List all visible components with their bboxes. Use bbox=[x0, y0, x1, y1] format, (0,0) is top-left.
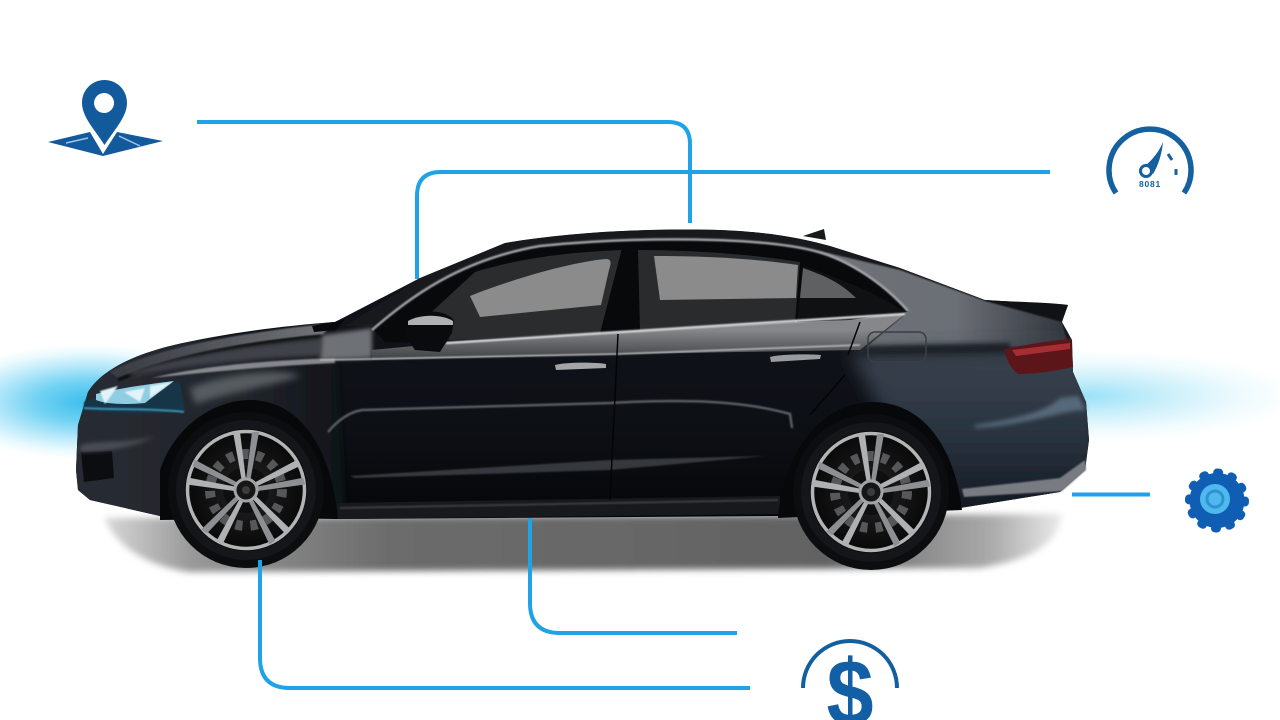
C pillar gray panel bbox=[815, 250, 1068, 352]
roof band bbox=[418, 230, 984, 300]
map roads bbox=[66, 136, 140, 146]
lower sill trim bbox=[337, 496, 780, 519]
bumper highlight bbox=[80, 436, 155, 452]
door handle rear bbox=[770, 354, 821, 362]
icon: dollar bbox=[803, 640, 897, 720]
gauge arc bbox=[1109, 129, 1191, 193]
connector line: location to roof bbox=[197, 122, 690, 223]
icon: speedometer bbox=[1109, 129, 1191, 193]
rear crease shadow bbox=[860, 343, 1010, 354]
needle bbox=[1146, 142, 1163, 174]
cowl vent bbox=[312, 319, 345, 332]
quarter window bbox=[797, 266, 905, 322]
rear quarter panel bbox=[850, 345, 1100, 520]
spoiler bbox=[985, 300, 1068, 320]
shoulder band bbox=[372, 314, 905, 360]
antenna bbox=[803, 229, 826, 240]
front window bbox=[412, 250, 622, 340]
quarter window reflection bbox=[800, 268, 856, 298]
car bbox=[70, 229, 1100, 570]
mirror highlight bbox=[408, 316, 453, 325]
door crease bbox=[328, 401, 792, 432]
car body bbox=[76, 230, 1089, 519]
hood top highlight bbox=[110, 323, 335, 378]
rear window bbox=[638, 250, 800, 331]
dollar arc bbox=[803, 641, 897, 688]
tail light bbox=[1004, 339, 1073, 374]
mirror bbox=[404, 311, 454, 352]
connector line: gauge to windshield bbox=[417, 172, 1050, 279]
belt chrome bbox=[446, 314, 905, 343]
fender top reflection bbox=[190, 372, 300, 404]
door handle front bbox=[555, 363, 606, 370]
door seam bbox=[610, 322, 860, 500]
tail light highlight bbox=[1012, 343, 1070, 356]
window surround bbox=[374, 240, 908, 343]
rear wheel bbox=[793, 414, 949, 570]
rear window reflection bbox=[654, 256, 798, 300]
icon: map pin on map bbox=[48, 80, 163, 156]
rear bumper trim bbox=[962, 460, 1086, 497]
gear teeth bbox=[1190, 473, 1244, 528]
headlight blue edge bbox=[84, 408, 184, 412]
fuel door bbox=[868, 332, 926, 362]
pin bbox=[82, 80, 127, 145]
front window reflection bbox=[470, 259, 611, 317]
door lower reflection bbox=[350, 456, 765, 478]
front fender shading bbox=[70, 335, 345, 520]
icon: gear bbox=[1189, 472, 1245, 528]
gear hub bbox=[1200, 484, 1230, 514]
headlight surround bbox=[84, 382, 185, 413]
gauge label: 8081 bbox=[1139, 179, 1161, 189]
front wheel arch bbox=[160, 400, 338, 520]
rear bumper reflection bbox=[975, 396, 1086, 428]
front wheel bbox=[168, 412, 324, 568]
rear wheel arch bbox=[778, 402, 962, 518]
headlight bbox=[96, 381, 174, 404]
connector line: front wheel to dollar bbox=[260, 560, 750, 688]
connector line: rear bumper to gear bbox=[1072, 492, 1150, 496]
shoulder chrome line bbox=[320, 345, 860, 360]
headlight inner bbox=[100, 382, 172, 404]
hood crease bbox=[118, 336, 322, 380]
cowl panel bbox=[320, 328, 372, 360]
gauge ticks bbox=[1168, 154, 1176, 175]
hood side panel bbox=[130, 338, 322, 376]
headlight glow on the left bbox=[0, 344, 245, 460]
pillar bbox=[600, 248, 638, 334]
fender highlight stripe bbox=[152, 358, 335, 378]
roof chrome bbox=[372, 239, 908, 330]
body paint shading, clipped to silhouette bbox=[70, 230, 1100, 520]
front grille bbox=[81, 451, 114, 482]
tail glow on the right bbox=[870, 350, 1280, 442]
ground shadow bbox=[105, 514, 1062, 572]
connector line: sill to lower label bbox=[530, 518, 737, 633]
map base bbox=[48, 132, 163, 156]
